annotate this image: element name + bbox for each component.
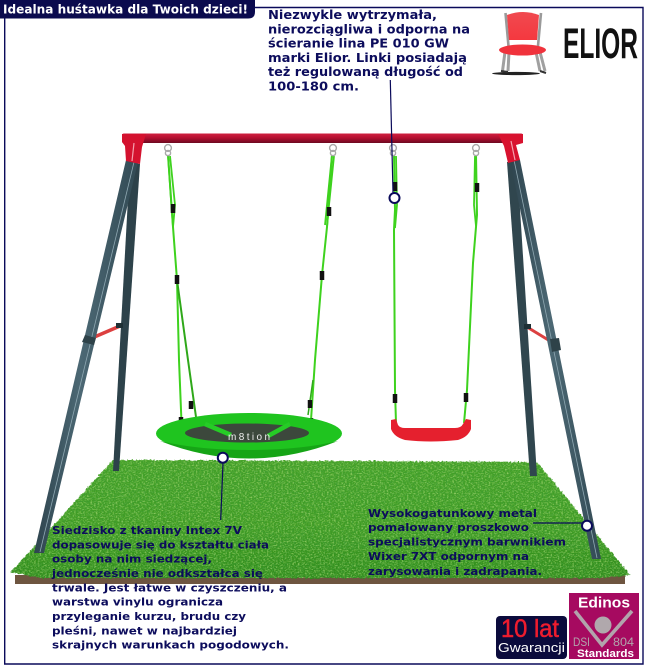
disc swing seat (156, 413, 342, 458)
disc swing ropes (168, 155, 334, 435)
right bracket (498, 134, 523, 163)
icon: red chair (492, 12, 546, 75)
grass platform (11, 460, 630, 584)
callout text: metal: pomalowany proszkowo (368, 521, 529, 534)
callout text: metal: zarysowania i zadrapania. (368, 565, 542, 578)
callout text: seat fabric: skrajnych warunkach pogodowych. (52, 639, 289, 652)
callout text: seat fabric: jednocześnie nie odkształca się (51, 567, 263, 580)
badge: Edinos standards (569, 593, 639, 660)
seat swing ropes (394, 155, 477, 423)
right brace (527, 327, 550, 341)
callout text: metal: specjalistycznym barwnikiem (368, 535, 566, 548)
seat swing (391, 419, 471, 442)
callout text: metal (368, 507, 566, 578)
callout text: rope: marki Elior. Linki posiadają (268, 51, 467, 65)
pointer: seat (218, 453, 228, 520)
badge: Edinos standards: 804 (613, 635, 634, 649)
callout text: metal: Wysokogatunkowy metal (368, 507, 537, 520)
callout text: seat fabric: Siedzisko z tkaniny Intex 7V (52, 524, 243, 537)
swing frame (34, 134, 601, 559)
pointer: metal (533, 521, 592, 531)
badge: 10-year warranty: Gwarancji (498, 640, 565, 655)
callout text: seat fabric: przyleganie kurzu, brudu czy (52, 610, 246, 623)
badge: Edinos standards: Edinos (578, 594, 630, 612)
hanging hooks (165, 145, 479, 156)
callout text: seat fabric: osoby na nim siedzącej, (52, 553, 212, 566)
right inner leg (507, 162, 537, 476)
callout text: seat fabric: pleśni, nawet w najbardziej (52, 624, 237, 637)
rope fasteners (173, 204, 329, 428)
badge: 10-year warranty: 10 lat (501, 615, 559, 643)
callout text: seat fabric: dopasowuje się do kształtu ciała (52, 538, 269, 551)
left brace (92, 326, 120, 338)
right outer leg (510, 160, 601, 559)
callout text: rope: 100-180 cm. (268, 80, 359, 94)
badge: 10-year warranty (496, 615, 567, 659)
left inner leg (113, 162, 140, 471)
callout text: rope (268, 8, 470, 94)
callout text: seat fabric: warstwa vinylu ogranicza (52, 596, 223, 609)
title tab: Idealna huśtawka dla Twoich dzieci! (3, 3, 248, 17)
callout text: rope: też regulowaną długość od (268, 65, 463, 79)
callout text: metal: Wixer 7XT odpornym na (368, 550, 529, 563)
callout text: rope: ścieranie lina PE 010 GW (268, 37, 449, 51)
top bar (122, 134, 523, 143)
soil layer (15, 575, 625, 584)
left outer leg (34, 160, 138, 553)
rope fasteners (395, 182, 477, 403)
callout text: seat fabric (51, 524, 289, 652)
callout text: seat fabric: trwale. Jest łatwe w czyszczeniu, a (52, 581, 287, 594)
seat straps (205, 424, 290, 436)
left bracket (122, 134, 146, 164)
callout text: rope: nierozciągliwa i odporna na (268, 22, 470, 36)
callout text: rope: Niezwykle wytrzymała, (268, 8, 437, 22)
badge: Edinos standards: Standards (577, 648, 634, 660)
seat logo: m8tion (228, 432, 270, 443)
pointer: rope (390, 80, 400, 203)
badge: Edinos standards: DSI (573, 635, 590, 649)
